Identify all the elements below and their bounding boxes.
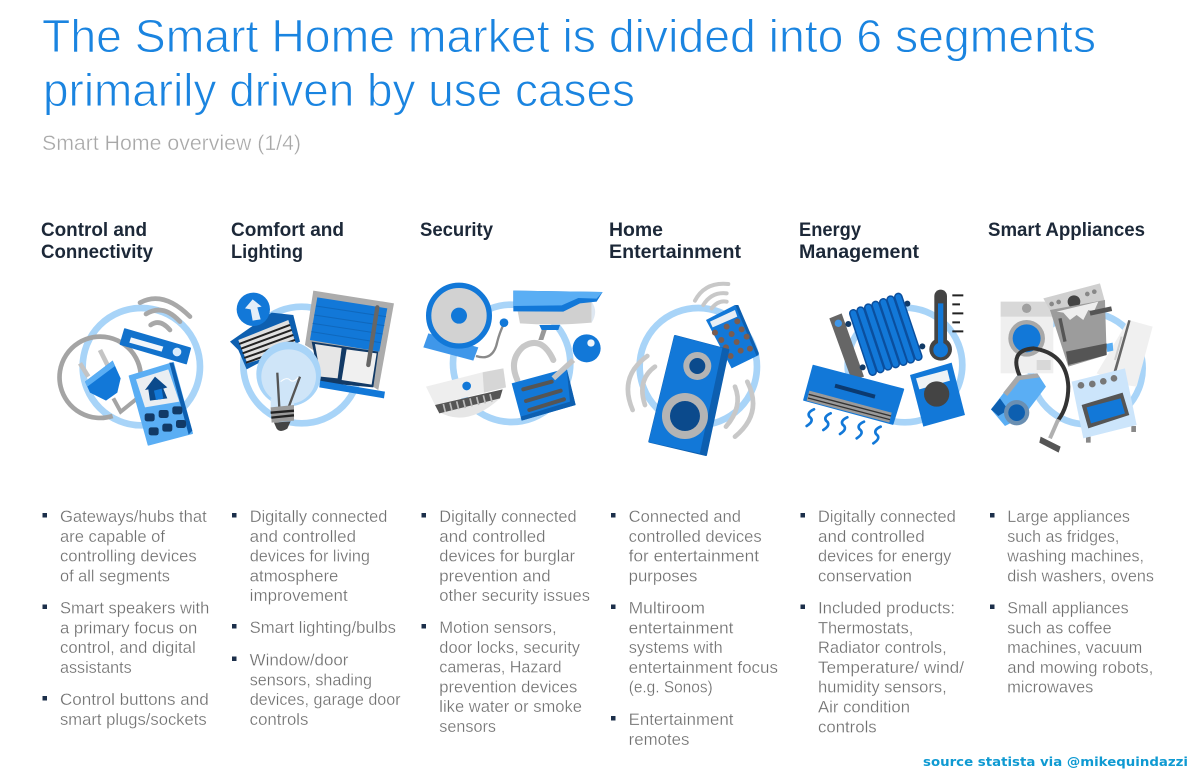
- bullet list: home entertainment: systems with: [629, 639, 723, 657]
- bullet list: control and connectivity: of all segments: [60, 567, 170, 585]
- bullet list: comfort and lighting: Digitally connected: [250, 508, 387, 526]
- bullet list: energy management: Air condition: [818, 698, 910, 716]
- bullet list: control and connectivity: are capable of: [60, 528, 165, 546]
- bullet list: smart appliances: dish washers, ovens: [1007, 567, 1154, 585]
- heading: energy management: Management: [799, 242, 920, 263]
- bullet list: security: Digitally connected: [439, 508, 577, 526]
- bullet list: smart appliances: [990, 508, 1154, 697]
- bullet list: control and connectivity: controlling devices: [60, 548, 197, 566]
- bullet list: security: sensors: [439, 718, 496, 736]
- bullet list: smart appliances: such as coffee: [1007, 619, 1112, 637]
- heading: comfort and lighting: Lighting: [231, 242, 303, 263]
- heading: home entertainment: Entertainment: [609, 242, 742, 263]
- title: primarily driven by use cases: [43, 64, 635, 116]
- subtitle: Smart Home overview (1/4): [42, 131, 301, 155]
- bullet list: security: prevention devices: [439, 678, 577, 696]
- icon: washer, coffee machine, fridge, oven and vacuum: [991, 283, 1153, 453]
- heading: control and connectivity: Control and: [41, 220, 147, 241]
- icon: alarm bell, camera, padlock and smoke detector: [423, 285, 603, 422]
- bullet list: comfort and lighting: devices, garage door: [250, 691, 401, 709]
- bullet list: energy management: and controlled: [818, 528, 925, 546]
- bullet list: control and connectivity: Smart speakers with: [60, 600, 209, 618]
- bullet list: control and connectivity: assistants: [60, 659, 132, 677]
- bullet list: energy management: humidity sensors,: [818, 679, 947, 697]
- heading: comfort and lighting: Comfort and: [231, 220, 344, 241]
- bullet list: home entertainment: Entertainment: [629, 711, 734, 729]
- panel: energy management: [799, 220, 965, 736]
- bullet list: energy management: conservation: [818, 567, 912, 585]
- bullet list: smart appliances: washing machines,: [1006, 548, 1144, 566]
- bullet list: home entertainment: for entertainment: [629, 548, 759, 566]
- bullet list: security: cameras, Hazard: [439, 659, 562, 677]
- bullet list: home entertainment: [611, 508, 778, 749]
- bullet list: smart appliances: such as fridges,: [1007, 528, 1119, 546]
- bullet list: comfort and lighting: Smart lighting/bulbs: [250, 619, 396, 637]
- bullet list: home entertainment: remotes: [629, 731, 689, 749]
- bullet list: home entertainment: controlled devices: [629, 528, 762, 546]
- bullet list: energy management: Digitally connected: [818, 508, 956, 526]
- bullet list: control and connectivity: [42, 508, 209, 729]
- panel: comfort and lighting: [230, 220, 401, 729]
- bullet list: home entertainment: entertainment: [629, 619, 734, 637]
- icon: radiator, thermometer, air conditioner and meter: [804, 295, 965, 443]
- heading: control and connectivity: [41, 220, 153, 263]
- panel: home entertainment: [609, 220, 778, 749]
- bullet list: control and connectivity: a primary focus on: [60, 619, 197, 637]
- heading: security: Security: [420, 220, 493, 241]
- bullet list: energy management: Thermostats,: [818, 619, 913, 637]
- title: The Smart Home market is divided into 6 segments: [42, 10, 1096, 62]
- bullet list: control and connectivity: Control buttons and: [60, 691, 209, 709]
- bullet list: security: devices for burglar: [439, 548, 576, 566]
- bullet list: security: and controlled: [439, 528, 546, 546]
- bullet list: comfort and lighting: sensors, shading: [250, 671, 372, 689]
- bullet list: home entertainment: Connected and: [629, 508, 741, 526]
- bullet list: comfort and lighting: and controlled: [250, 528, 356, 546]
- bullet list: smart appliances: Small appliances: [1007, 600, 1129, 618]
- bullet list: smart appliances: and mowing robots,: [1007, 659, 1153, 677]
- heading: energy management: [799, 220, 920, 263]
- bullet list: comfort and lighting: Window/door: [250, 652, 349, 670]
- bullet list: home entertainment: (e.g. Sonos): [629, 679, 713, 697]
- bullet list: security: door locks, security: [439, 639, 581, 657]
- bullet list: security: prevention and: [439, 567, 551, 585]
- bullet list: control and connectivity: control, and digital: [60, 639, 196, 657]
- bullet list: energy management: Radiator controls,: [818, 639, 947, 657]
- heading: smart appliances: Smart Appliances: [988, 220, 1145, 241]
- bullet list: energy management: [800, 508, 964, 736]
- bullet list: control and connectivity: Gateways/hubs that: [60, 508, 207, 526]
- panel: smart appliances: [988, 220, 1154, 697]
- heading: comfort and lighting: [231, 220, 344, 263]
- bullet list: smart appliances: machines, vacuum: [1007, 639, 1142, 657]
- bullet list: security: other security issues: [439, 587, 590, 605]
- source credit: source statista via @mikequindazzi: [923, 754, 1188, 769]
- icon: plug, router and smart remote: [60, 299, 200, 445]
- bullet list: energy management: controls: [818, 718, 877, 736]
- bullet list: energy management: devices for energy: [818, 548, 952, 566]
- bullet list: energy management: Included products:: [818, 600, 955, 618]
- heading: control and connectivity: Connectivity: [41, 242, 153, 263]
- bullet list: home entertainment: Multiroom: [629, 600, 705, 618]
- bullet list: comfort and lighting: controls: [250, 711, 308, 729]
- heading: home entertainment: Home: [609, 220, 663, 241]
- bullet list: home entertainment: purposes: [629, 567, 697, 585]
- bullet list: security: [422, 508, 590, 736]
- bullet list: energy management: Temperature/ wind/: [818, 659, 964, 677]
- bullet list: comfort and lighting: improvement: [250, 587, 348, 605]
- bullet list: smart appliances: Large appliances: [1007, 508, 1130, 526]
- bullet list: home entertainment: entertainment focus: [629, 659, 778, 677]
- bullet list: comfort and lighting: atmosphere: [250, 567, 338, 585]
- title: [42, 10, 1096, 116]
- panel: control and connectivity: [41, 220, 209, 729]
- icon: speaker and remote control: [628, 284, 759, 455]
- bullet list: security: Motion sensors,: [439, 619, 557, 637]
- bullet list: comfort and lighting: [232, 508, 401, 729]
- heading: energy management: Energy: [799, 220, 861, 241]
- bullet list: control and connectivity: smart plugs/sockets: [60, 711, 207, 729]
- panel: security: [420, 220, 603, 736]
- heading: home entertainment: [609, 220, 742, 263]
- bullet list: smart appliances: microwaves: [1007, 679, 1093, 697]
- icon: garage door, window blind and light bulb: [230, 291, 394, 431]
- bullet list: comfort and lighting: devices for living: [250, 548, 370, 566]
- bullet list: security: like water or smoke: [439, 698, 582, 716]
